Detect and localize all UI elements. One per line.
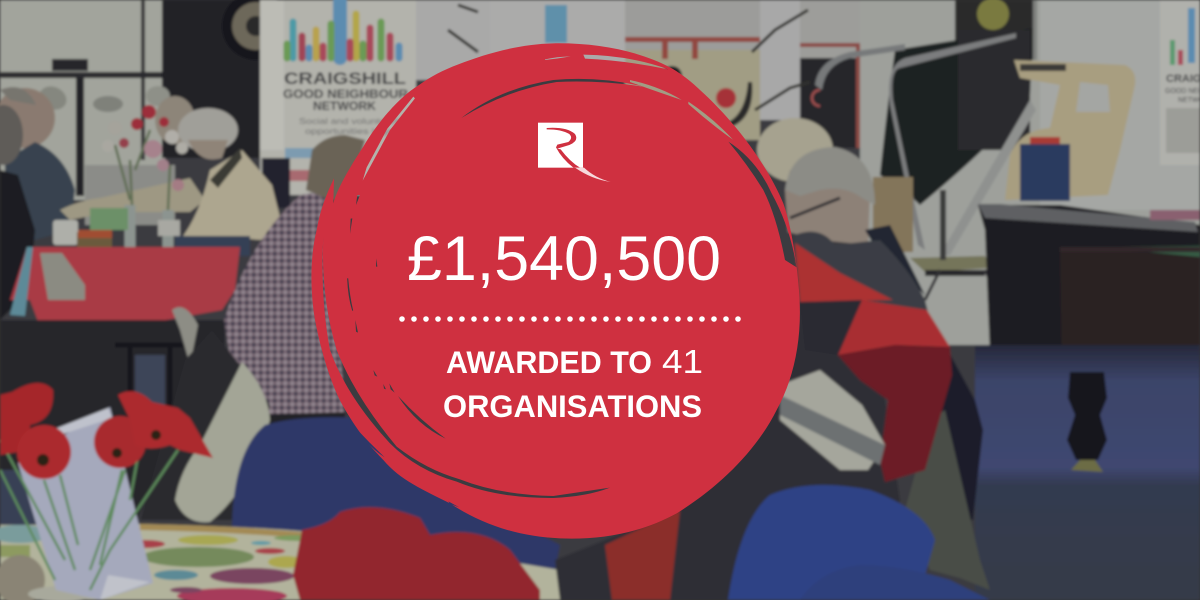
mug and table items [53,208,250,256]
red backpack [605,510,680,600]
dark grey hooded jacket [795,232,928,312]
dark bag with white cushion [140,330,270,522]
subheading: AWARDED TO [446,344,652,380]
blue seat backs [728,485,990,600]
blue chair back, left [232,417,560,570]
chair legs under table [115,345,185,410]
lighting truss [0,0,170,196]
black backdrop and net [815,0,1037,250]
poster: Craigshill Good Neighbour Network: CRAIGSHILL [284,69,406,88]
folding chair [910,100,1036,300]
poster: Craigshill Good Neighbour Network: opportunities in your [305,127,405,136]
picture frame [18,407,153,600]
back man in grey behind flowers [155,96,195,144]
poster: Craigshill Good Neighbour Network: GOOD NEIGHBOUR [283,89,409,101]
top centre wall and banners [416,0,860,148]
cream arcade game board [1005,60,1135,201]
red jacket [795,243,952,482]
poster: Craigshill Good Neighbour Network: Social and volunteering [299,117,409,126]
round table with polka dots [0,524,620,600]
subheading: 41 [662,343,703,380]
red carnation foreground [293,507,540,600]
lower wall band left [85,165,175,225]
small dark strip left of frame [0,470,40,530]
right wall [860,0,1200,345]
speaker by poster [262,158,290,208]
wooden crate behind man [873,177,913,252]
red brush-stroke circle [300,35,810,545]
right-hand poster [1160,0,1200,165]
poster: Craigshill Good Neighbour Network [260,0,416,198]
white-haired man, beige sweater [178,108,282,240]
dark panel with dartboard [162,0,290,158]
under-table area [0,320,225,525]
grey-haired man with glasses [785,147,925,295]
arm and sweater in back [60,178,205,220]
second pool table with green baize [1060,246,1200,375]
white and grey bag band [780,370,885,470]
blonde-haired man [757,118,833,182]
chair arm [172,307,198,365]
headline amount: £1,540,500 [407,224,721,294]
poppies on stems [0,383,213,590]
dotted divider [399,316,741,322]
string lights [448,5,810,110]
back-left man, blue sweater [0,87,75,240]
poster: Craigshill Good Neighbour Network: NETWORK [313,101,377,113]
back wall left [0,0,165,200]
flowers and vases on table [102,105,188,260]
table leg [1067,372,1107,472]
pool table [978,204,1200,355]
floor [975,345,1200,600]
subheading [443,343,703,424]
dark coats [935,345,983,520]
dark wheelchair and jacket mass [555,300,900,600]
subheading: ORGANISATIONS [443,388,702,424]
logo: white square with R swoosh [538,123,611,182]
red tablecloth [10,247,240,372]
olive coat [905,410,990,590]
foreground-left man, dark top [0,105,35,320]
man in check shirt [224,135,365,425]
